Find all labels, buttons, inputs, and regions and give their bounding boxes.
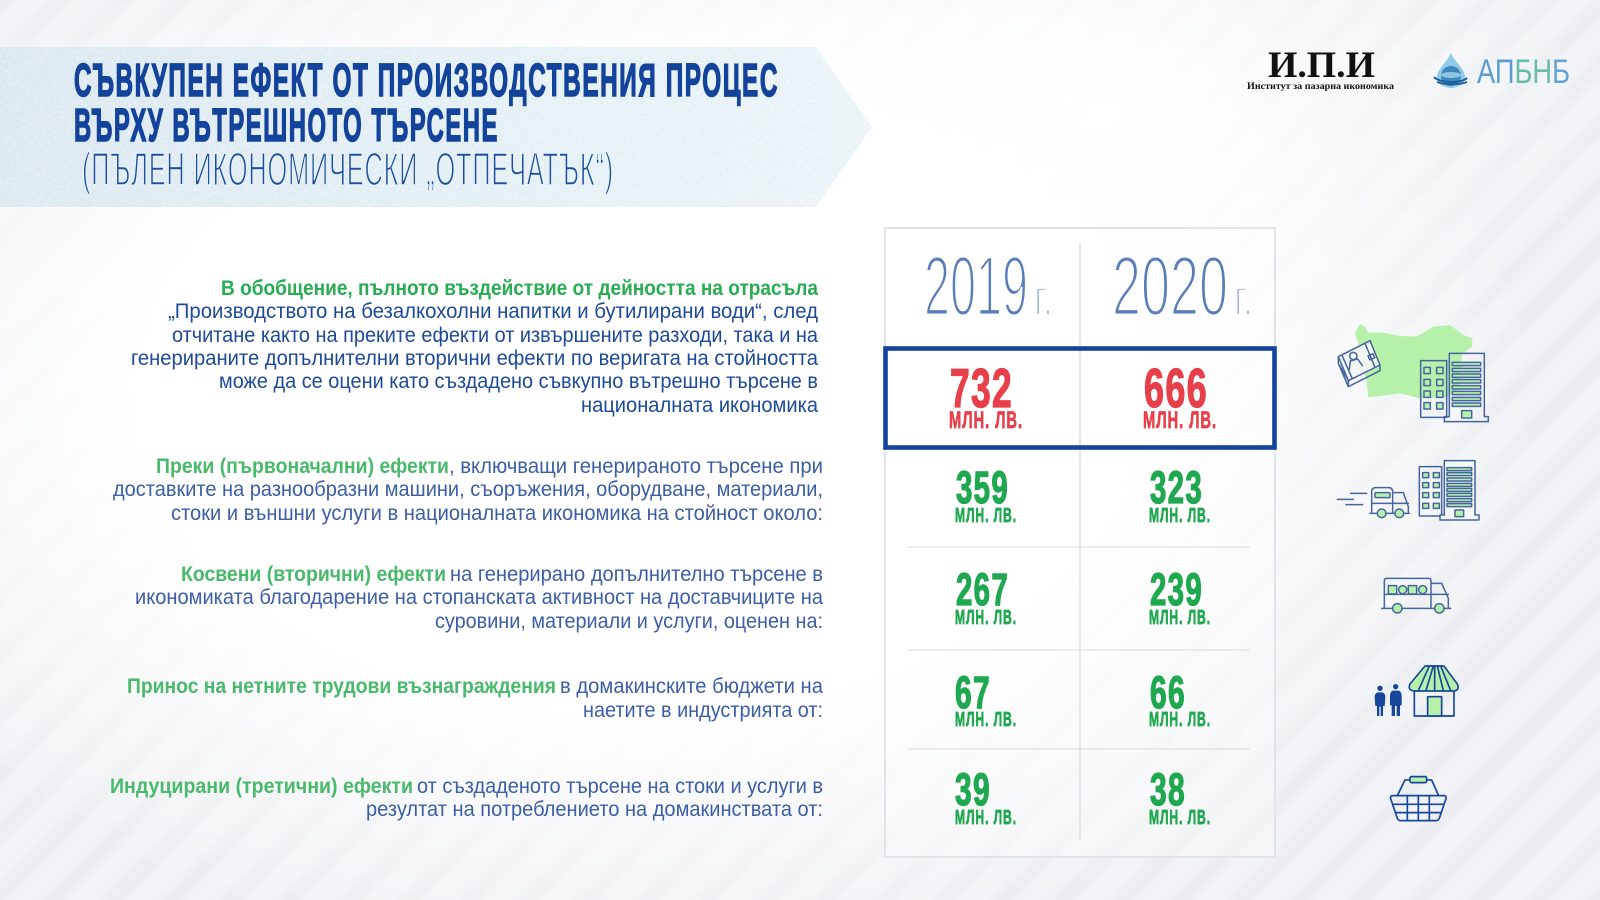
panel: data table	[885, 228, 1275, 857]
year 2019: г.	[1034, 269, 1053, 327]
row: direct effects values: МЛН. ЛВ.	[955, 505, 1017, 527]
logo: АПБНБ: АПБНБ	[1477, 53, 1570, 91]
text block: direct effects: , включващи генерираното търсене при	[449, 455, 823, 478]
text block: summary: националната икономика	[581, 394, 818, 417]
logo: ИПИ: Институт за пазарна икономика	[1247, 82, 1394, 92]
text block: indirect effects: Косвени (вторични) ефекти	[181, 563, 446, 586]
row: direct effects values: 359	[956, 462, 1009, 513]
text block: induced effects: резултат на потреблението на домакинствата от:	[366, 798, 823, 821]
logo: АПБНБ	[1434, 53, 1570, 91]
logo: ИПИ: И.П.И	[1268, 45, 1375, 86]
highlighted total row	[886, 348, 1274, 448]
year 2020: г.	[1234, 269, 1253, 327]
icon: people and house	[1375, 666, 1458, 716]
text block: summary	[131, 277, 818, 417]
text block: indirect effects: икономиката благодарение на стопанската активност на доставчиците на	[135, 586, 823, 609]
text block: induced effects: Индуцирани (третични) ефекти	[110, 775, 413, 798]
year 2020: 2020	[1112, 239, 1228, 333]
row: direct effects values: МЛН. ЛВ.	[1149, 505, 1211, 527]
row: direct effects values	[955, 462, 1211, 527]
row: induced effects values: 39	[955, 764, 991, 815]
title: ВЪРХУ ВЪТРЕШНОТО ТЪРСЕНЕ	[74, 99, 499, 151]
text block: direct effects: доставките на разнообразни машини, съоръжения, оборудване, материали,	[113, 478, 823, 501]
text block: labour income: в домакинските бюджети на	[560, 675, 823, 698]
row: induced effects values: МЛН. ЛВ.	[955, 807, 1017, 829]
row: indirect effects values: МЛН. ЛВ.	[1149, 607, 1211, 629]
row: labour income values: МЛН. ЛВ.	[1149, 709, 1211, 731]
text block: labour income	[127, 675, 823, 722]
banner: title arrow	[0, 47, 872, 207]
row: induced effects values: МЛН. ЛВ.	[1149, 807, 1211, 829]
icon: van	[1382, 578, 1451, 613]
row: direct effects values: 323	[1150, 462, 1203, 513]
text block: direct effects: Преки (първоначални) ефекти	[156, 455, 449, 478]
row: labour income values: МЛН. ЛВ.	[955, 709, 1017, 731]
highlighted total row: 666	[1144, 357, 1208, 419]
row: indirect effects values	[955, 564, 1211, 629]
text block: summary: В обобщение, пълното въздействие от дейността на отрасъла	[221, 277, 818, 300]
highlighted total row: МЛН. ЛВ.	[949, 407, 1023, 434]
row: indirect effects values: МЛН. ЛВ.	[955, 607, 1017, 629]
text block: summary: отчитане както на преките ефекти от извършените разходи, така и на	[172, 324, 818, 347]
highlighted total row: МЛН. ЛВ.	[1143, 407, 1217, 434]
icon: delivery truck and buildings	[1337, 461, 1479, 520]
text block: labour income: Принос на нетните трудови възнаграждения	[127, 675, 556, 698]
text block: indirect effects: на генерирано допълнително търсене в	[450, 563, 823, 586]
row: indirect effects values: 267	[956, 564, 1009, 615]
icon: Bulgaria map with money and buildings	[1338, 324, 1488, 422]
row: induced effects values	[955, 764, 1211, 829]
title: СЪВКУПЕН ЕФЕКТ ОТ ПРОИЗВОДСТВЕНИЯ ПРОЦЕС	[74, 54, 779, 106]
text block: indirect effects: суровини, материали и услуги, оценен на:	[435, 610, 823, 633]
row: labour income values: 66	[1150, 667, 1186, 718]
text block: direct effects: стоки и външни услуги в националната икономика на стойност около:	[171, 502, 823, 525]
text block: summary: „Производството на безалкохолни напитки и бутилирани води“, след	[168, 300, 818, 323]
text block: direct effects	[113, 455, 823, 525]
text block: induced effects: от създаденото търсене на стоки и услуги в	[417, 775, 823, 798]
title	[74, 54, 779, 195]
icon: shopping basket	[1391, 777, 1446, 821]
text block: summary: генерираните допълнителни вторични ефекти по веригата на стойността	[131, 347, 818, 370]
row: indirect effects values: 239	[1150, 564, 1203, 615]
title: (ПЪЛЕН ИКОНОМИЧЕСКИ „ОТПЕЧАТЪК“)	[82, 143, 614, 195]
text block: labour income: наетите в индустрията от:	[583, 699, 823, 722]
row: induced effects values: 38	[1150, 764, 1186, 815]
text block: induced effects	[110, 775, 823, 821]
row: labour income values	[955, 667, 1211, 731]
year 2019	[924, 239, 1053, 333]
text block: indirect effects	[135, 563, 823, 633]
row: labour income values: 67	[955, 667, 991, 718]
text block: summary: може да се оцени като създадено съвкупно вътрешно търсене в	[219, 370, 818, 393]
logo: ИПИ	[1247, 45, 1394, 92]
year 2019: 2019	[924, 239, 1028, 333]
highlighted total row: 732	[950, 357, 1013, 419]
